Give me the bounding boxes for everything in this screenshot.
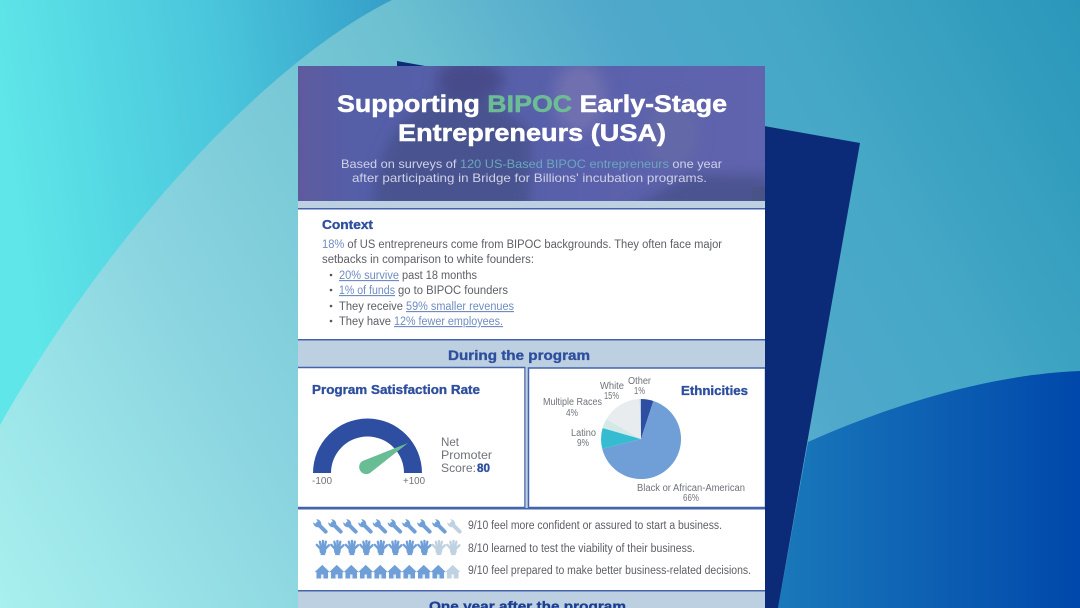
- context bullets: [330, 270, 514, 328]
- infographic page: [297, 60, 770, 608]
- header panel: [298, 66, 765, 201]
- context bullets: 20% survive: [339, 270, 399, 282]
- context heading: Context: [322, 217, 374, 232]
- context bullets: 12% fewer employees.: [394, 316, 503, 328]
- row text: viability: 8/10 learned to test the viability of their business.: [468, 543, 695, 555]
- context paragraph: 18% of US entrepreneurs come from BIPOC backgrounds. They often face major: [322, 239, 722, 251]
- title: [337, 91, 727, 147]
- pie labels: 9%: [577, 438, 589, 449]
- row text: confidence: 9/10 feel more confident or assured to start a business.: [468, 520, 722, 532]
- dark back sheet: [397, 61, 860, 608]
- pie labels: 15%: [604, 391, 619, 402]
- pie labels: 4%: [566, 408, 578, 419]
- context bullets: 1% of funds: [339, 285, 395, 297]
- title: Supporting BIPOC Early-Stage: [337, 91, 727, 118]
- pie labels: [543, 376, 745, 504]
- subtitle: Based on surveys of 120 US-Based BIPOC entrepreneurs one year: [341, 157, 722, 171]
- panel: program satisfaction rate: [297, 368, 525, 508]
- net promoter score: Net: [441, 437, 460, 449]
- band: during the program: [298, 339, 765, 368]
- context bullets: They receive: [339, 301, 403, 313]
- gauge chart: [312, 419, 425, 487]
- title: Entrepreneurs (USA): [398, 120, 666, 147]
- net promoter score: [441, 437, 492, 475]
- panel: pictogram rows: [313, 519, 750, 578]
- pie labels: Black or African-American: [637, 483, 745, 494]
- panel: context: [322, 217, 722, 328]
- context bullets: past 18 months: [402, 270, 477, 282]
- band: during the program: During the program: [448, 347, 590, 363]
- context paragraph: setbacks in comparison to white founders:: [322, 254, 534, 266]
- pie labels: Other: [628, 376, 652, 387]
- row text: decisions: 9/10 feel prepared to make better business-related decisions.: [468, 565, 751, 577]
- subtitle: after participating in Bridge for Billions' incubation programs.: [352, 171, 707, 185]
- context bullets: go to BIPOC founders: [398, 285, 508, 297]
- pie labels: 66%: [683, 493, 699, 504]
- pie labels: Latino: [571, 428, 596, 439]
- ethnicities heading: Ethnicities: [681, 383, 748, 398]
- context paragraph: [322, 239, 722, 266]
- context bullets: 59% smaller revenues: [406, 301, 514, 313]
- pie labels: 1%: [634, 386, 645, 397]
- gauge chart: -100: [312, 476, 332, 487]
- context bullets: They have: [339, 316, 391, 328]
- satisfaction heading: Program Satisfaction Rate: [312, 382, 480, 397]
- icons: wrenches 9 of 10: [313, 519, 460, 532]
- net promoter score: 80: [477, 463, 490, 475]
- subtitle: [342, 160, 722, 184]
- panel: ethnicities: [528, 368, 766, 508]
- icons: houses 9 of 10: [315, 565, 460, 579]
- pie labels: White: [600, 381, 624, 392]
- gauge chart: +100: [403, 476, 425, 487]
- icons: hands 8 of 10: [317, 541, 459, 555]
- pie chart: [601, 399, 681, 479]
- net promoter score: Score:: [441, 463, 476, 475]
- net promoter score: Promoter: [441, 450, 492, 462]
- band: one year after the program: [298, 590, 765, 608]
- pie labels: Multiple Races: [543, 397, 602, 408]
